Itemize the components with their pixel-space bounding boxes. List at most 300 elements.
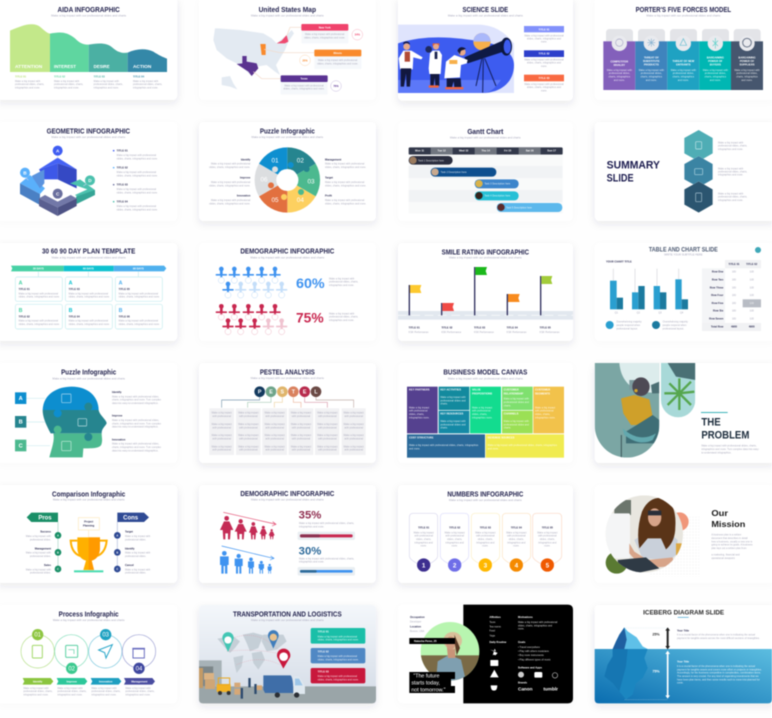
descriptions: Innovation <box>112 437 126 441</box>
card B 30 days: slides, charts, infographics and more. <box>19 323 60 326</box>
stage descriptions: infographics and more. <box>94 86 119 89</box>
column: bargaining power of buyers: and more. <box>710 79 721 82</box>
flag labels: KSK Performance <box>474 331 495 334</box>
pros column: Pros <box>38 515 52 521</box>
stage descriptions: professional slides, charts, <box>94 83 123 86</box>
task bar 4 <box>475 191 519 200</box>
key partners: slides, charts, <box>409 413 424 416</box>
motivation and goals text: Software and Apps <box>518 665 542 669</box>
cons column: Cancel <box>125 563 134 567</box>
text block 3: more. <box>541 89 547 92</box>
data table: Total Row <box>711 324 724 328</box>
descriptions: professional slides, charts, <box>718 145 748 148</box>
shield 5: with professional <box>538 535 557 538</box>
card B 30 days <box>15 304 62 329</box>
accent line <box>678 616 689 619</box>
descriptions: data into easy-to-understand infographics. <box>112 402 159 405</box>
below water text: payment for tangible assets and covers more effort on projects or intangibles. <box>677 668 762 671</box>
stage descriptions: professional slides, charts, <box>54 83 84 86</box>
shield 5 <box>533 513 562 572</box>
heading <box>711 508 745 529</box>
wave area chart: ATTENTION <box>15 64 42 69</box>
timeline arrow bar: 90 DAYS <box>133 266 144 270</box>
heading: PESTEL ANALYSIS <box>260 369 315 376</box>
data table: Row One <box>712 270 724 274</box>
info box 3: Make a big impact with professional <box>318 675 357 678</box>
column: threat of substitute products: THREAT OF <box>644 55 659 59</box>
text block 1 <box>524 26 564 44</box>
subtitle: Make a big impact with our professional slides and charts <box>51 13 127 17</box>
stage descriptions: infographics and more. <box>54 86 80 89</box>
heading: AIDA INFOGRAPHIC <box>57 7 120 14</box>
stat 75 percent <box>296 309 359 325</box>
process descriptions: infographics and more. <box>57 693 83 696</box>
wave area chart: DESIRE <box>94 64 110 69</box>
list items: slides, charts, infographics and more. <box>117 174 158 177</box>
card background <box>0 0 177 100</box>
column 6: with professional <box>344 437 363 440</box>
card B 90 days <box>115 304 162 329</box>
description: going to achieve its goals. A business <box>711 544 753 547</box>
descriptions: professional slides, charts, <box>718 196 748 199</box>
column 1: Make a big impact <box>212 412 232 415</box>
subtitle: Make a big impact with our professional slides and charts <box>448 13 524 17</box>
app icons <box>518 672 558 678</box>
heading: DEMOGRAPHIC INFOGRAPHIC <box>240 491 334 498</box>
left labels: slides, charts, infographics and more. <box>209 202 251 205</box>
right labels: slides, charts, infographics and more. <box>325 202 366 205</box>
value propositions: with professional <box>472 410 491 413</box>
column 3: with professional <box>265 415 284 418</box>
left labels: slides, charts, infographics and more. <box>209 184 251 187</box>
column 6: Make a big impact <box>344 445 364 448</box>
task bar 3: Task 3 Description here <box>484 183 511 186</box>
shield 2: TITLE 02 <box>449 526 461 530</box>
PESTEL circles: L <box>314 390 318 396</box>
task bar 1: Task 1 Description here <box>418 159 445 162</box>
name bar <box>409 638 455 644</box>
key resources: Make a big impact with <box>440 420 466 423</box>
column: bargaining power of buyers: charts, infographics <box>705 75 727 78</box>
step 3: 03 <box>102 633 110 639</box>
panel: summary slide <box>595 122 772 221</box>
US map <box>213 27 314 89</box>
cons column: professional slides. <box>125 538 146 541</box>
cons column: Make a big impact with <box>125 568 151 571</box>
heading: DEMOGRAPHIC INFOGRAPHIC <box>240 249 334 256</box>
shield 5: TITLE 05 <box>542 526 553 530</box>
column 5: with professional <box>318 415 337 418</box>
stage descriptions: professional slides, charts, <box>15 83 45 86</box>
shield 1: 1 <box>422 562 426 569</box>
card A 60 days: slides, charts, infographics and more. <box>69 296 110 299</box>
subtitle: Make a big impact with our professional slides and charts <box>251 376 325 380</box>
value propositions: slides, charts, <box>472 413 487 416</box>
panel: United States map <box>199 0 376 100</box>
heading: United States Map <box>259 7 316 14</box>
column: threat of substitute products: professional slides, <box>641 72 662 75</box>
info box 1 <box>311 628 365 644</box>
illustration: scientists with telescope <box>398 25 514 93</box>
column 5: with professional <box>318 449 337 452</box>
isometric diagram: B <box>23 170 27 175</box>
customer segments <box>533 387 564 433</box>
card B 90 days: Make a big impact with professional <box>119 320 158 323</box>
shield 1 <box>409 513 438 572</box>
left labels: Identify <box>241 157 251 161</box>
task bar 1 <box>409 156 453 165</box>
callout: Illinois: Make a big impact with professional <box>318 59 358 62</box>
column 3: Make a big impact <box>265 434 285 437</box>
text block 3: slides, charts, infographics and <box>527 86 562 89</box>
card background <box>398 363 573 463</box>
callout: New York: 34% <box>355 33 361 37</box>
left labels: Improve <box>240 176 251 180</box>
card background <box>0 605 177 703</box>
description: A business plan is a written <box>711 534 742 537</box>
column 6: Make a big impact <box>344 423 364 426</box>
timeline arrow bar <box>11 266 166 277</box>
pros column: A <box>57 533 59 537</box>
heading: SUMMARY <box>607 160 660 172</box>
shield 2: 2 <box>453 562 457 569</box>
stat 75 percent: professional slides, charts, <box>329 316 359 319</box>
interests column: Daily Routine <box>489 640 507 644</box>
column: bargaining power of suppliers: SUPPLIERS <box>739 63 755 67</box>
photo: plant on desk <box>661 360 695 420</box>
stat 60 percent <box>296 275 359 291</box>
data table: 100 <box>750 278 754 281</box>
stat 75 percent: Make a big impact with <box>329 313 355 316</box>
column 1: with professional <box>212 426 231 429</box>
column 5: with professional <box>318 437 337 440</box>
circle photo of woman with hat <box>419 622 483 682</box>
process tags: Innovation <box>99 679 113 683</box>
column 6: Make a big impact <box>344 434 364 437</box>
panel: puzzle head infographic <box>0 363 177 463</box>
blue figures 60 percent <box>216 267 287 298</box>
channels: charts. <box>504 427 511 430</box>
card background <box>398 485 573 583</box>
card A 30 days: Make a big impact with professional <box>19 292 58 295</box>
PESTEL circles: T <box>292 390 296 396</box>
process descriptions: professional slides, charts, <box>23 690 53 693</box>
chart header: Mon 11 <box>415 149 425 153</box>
description <box>711 534 753 560</box>
right labels: Make a big impact with professional <box>325 199 365 202</box>
column: threat of new entrants: Make a big impact with <box>671 69 697 72</box>
panel: resume slide <box>398 605 573 703</box>
data table: 100 <box>732 271 737 274</box>
cons column: Identify <box>125 546 135 550</box>
cons column: professional slides. <box>125 555 146 558</box>
left labels: Occupation <box>410 615 425 619</box>
column: competitor rivalry: professional slides, <box>609 72 630 75</box>
puzzle wheel: 05 <box>271 197 279 204</box>
column: threat of substitute products <box>635 29 667 90</box>
panel: our mission <box>604 495 752 574</box>
key resources: KEY RESOURCES <box>440 412 464 416</box>
callout: Texas: 76% <box>333 84 339 88</box>
pros column: professional slides. <box>30 572 51 575</box>
panel: table and chart slide <box>595 243 772 341</box>
column: bargaining power of suppliers: professional slides, <box>736 72 758 75</box>
photo: woman at computer <box>606 495 684 574</box>
shield 3: 3 <box>484 562 488 569</box>
road <box>398 311 573 320</box>
card background <box>0 485 177 583</box>
panel: comparison infographic <box>0 485 177 583</box>
column: bargaining power of suppliers: charts, infographics <box>736 75 759 78</box>
stat 30 percent: 30% <box>299 545 322 557</box>
key activities: Make a big impact with <box>440 396 466 399</box>
process tags: Identify <box>33 679 43 683</box>
motivation and goals text: • Play with others musicians <box>518 650 550 653</box>
chart legend: professional layout. <box>616 327 638 330</box>
column 1: with professional <box>212 449 231 452</box>
column 3: with professional <box>265 449 284 452</box>
description: document that describes in detail <box>711 537 748 540</box>
callout: Illinois <box>300 50 361 69</box>
info box 1: TITLE 01 <box>318 630 329 634</box>
customer relationship: RELATIONSHIP <box>504 391 523 395</box>
customer segments: SEGMENTS <box>535 391 550 395</box>
channels: professional slides and <box>504 423 530 426</box>
key partners: with professional <box>409 410 428 413</box>
column: threat of substitute products: charts, infographics <box>641 75 663 78</box>
motivation and goals text: Motivations <box>518 615 533 619</box>
text block 3: TITLE 03 <box>538 76 550 80</box>
brands: tumblr <box>543 686 558 691</box>
process tags: Improve <box>66 679 77 683</box>
value propositions: VALUE <box>472 388 481 392</box>
flag labels: KSK Performance <box>540 331 560 334</box>
process descriptions: infographics and more. <box>91 693 117 696</box>
column 1: with professional <box>212 415 231 418</box>
puzzle wheel: 02 <box>297 158 304 165</box>
cost structure <box>407 434 485 458</box>
list items <box>113 149 158 211</box>
declining arrow red <box>223 512 276 526</box>
descriptions: charts, infographics and more. Turn complex <box>112 399 162 402</box>
list items: Make a big impact with professional <box>117 171 156 174</box>
motivation and goals text: more. <box>518 627 525 630</box>
bar chart: Q2 <box>637 311 641 314</box>
shield 3 <box>471 513 500 572</box>
column: competitor rivalry <box>603 29 635 90</box>
panel: iceberg diagram <box>595 605 772 703</box>
process descriptions <box>23 687 155 696</box>
stage descriptions: infographics and more. <box>133 86 159 89</box>
stage descriptions: TITLE 02 <box>54 74 66 78</box>
key activities <box>439 387 469 410</box>
column 1: Make a big impact <box>212 445 232 448</box>
column 6: with professional <box>344 415 363 418</box>
heading: 30 60 90 DAY PLAN TEMPLATE <box>42 249 136 256</box>
list items: TITLE 01 <box>117 149 128 153</box>
column 1: Make a big impact <box>212 434 232 437</box>
column 3: Make a big impact <box>265 423 285 426</box>
PESTEL circles: S <box>281 390 285 396</box>
key activities: charts. <box>440 403 448 406</box>
column 4: with professional <box>292 415 311 418</box>
descriptions: Make a big impact with professional slides, <box>112 443 159 446</box>
shield 2: with professional <box>445 535 464 538</box>
subtitle: Make a big impact with our professional slides and charts <box>251 618 324 622</box>
customer relationship: charts. <box>504 404 511 407</box>
card A 60 days <box>65 277 112 301</box>
process descriptions: Make a big impact with <box>91 687 117 690</box>
shield 1: more. <box>420 545 427 548</box>
project planning box <box>78 518 99 537</box>
descriptions: Make a big impact with <box>718 142 744 145</box>
measure arrows: 75% <box>652 670 660 674</box>
badge icon <box>755 247 761 253</box>
card background <box>0 122 177 221</box>
chart header: Sat 16 <box>526 149 534 153</box>
card A 90 days: TITLE 05 <box>119 287 130 291</box>
cons column: A <box>116 533 118 537</box>
callout: Texas: slides, charts, infographics and more. <box>283 88 325 91</box>
value propositions: infographics more. <box>472 416 493 419</box>
left labels: slides, charts, infographics and more. <box>209 166 251 169</box>
card B 60 days: Make a big impact with professional <box>69 320 108 323</box>
descriptions: data into easy-to-understand infographics. <box>112 449 159 452</box>
descriptions: charts, infographics and more. Turn complex <box>112 446 162 449</box>
process descriptions: Make a big impact with <box>57 687 83 690</box>
subtitle: Make a big impact with our professional slides and charts <box>449 256 522 260</box>
key partners <box>407 387 438 433</box>
flag 3 green <box>474 267 487 315</box>
task bar 2 <box>431 168 496 177</box>
channels: Make a big impact with <box>504 420 530 423</box>
column: bargaining power of suppliers: and more. <box>741 79 753 82</box>
info box 2: Make a big impact with professional <box>318 655 357 658</box>
key activities: professional slides and <box>440 399 466 402</box>
interests column <box>489 615 507 644</box>
interests column: Affinities <box>489 615 501 619</box>
callout: New York: New York <box>319 25 331 29</box>
motivation and goals text: Make a big impact with professional <box>518 621 558 624</box>
heading: Puzzle Infographic <box>61 370 116 377</box>
shield 2: Make a big impact <box>445 531 465 534</box>
data table: Row Seven <box>709 317 724 321</box>
column: threat of new entrants <box>667 29 699 90</box>
black panel <box>463 605 573 703</box>
motivation and goals text <box>518 615 558 669</box>
shield 1: Make a big impact <box>414 531 434 534</box>
subtitle: Make a big impact with our professional slides and charts <box>251 13 324 17</box>
revenue sources: Make a big impact with professional slides, charts, infographics <box>488 444 558 447</box>
heading: BUSINESS MODEL CANVAS <box>443 370 528 377</box>
motivation and goals text: • Travel everywhere <box>518 646 540 649</box>
data table <box>702 260 761 331</box>
flag labels: TITLE 02 <box>441 326 453 330</box>
flag 4 orange <box>507 294 520 315</box>
left labels: Make a big impact with professional <box>211 199 251 202</box>
above water text <box>677 628 760 640</box>
column: bargaining power of buyers: BUYERS <box>710 63 721 67</box>
flag labels: KSK Performance <box>507 331 527 334</box>
column: competitor rivalry: COMPETITOR <box>610 60 628 64</box>
column 4: with professional <box>292 426 311 429</box>
left labels: Location <box>410 625 421 629</box>
isometric diagram: D <box>88 178 92 183</box>
stat 35 percent: 35% <box>299 510 322 522</box>
info box 1: Make a big impact with professional <box>318 635 357 638</box>
stage descriptions: infographics and more. <box>15 86 41 89</box>
green circle <box>606 552 628 574</box>
process descriptions: professional slides, charts, <box>125 690 155 693</box>
stat 35 percent <box>298 510 355 540</box>
forklift and workers <box>217 678 262 699</box>
descriptions: Make a big impact with <box>718 167 744 170</box>
bar chart: Q4 <box>680 311 684 314</box>
heading: NUMBERS INFOGRAPHIC <box>447 492 523 499</box>
heading: Puzzle Infographic <box>260 129 315 136</box>
card B 90 days: TITLE 06 <box>119 314 130 318</box>
heading: THE <box>701 417 721 429</box>
below water text: have been plan items, and then some results such to move into planned for <box>677 678 760 681</box>
heading <box>607 160 660 184</box>
subtitle: Make a big impact with our professional slides and charts <box>251 135 324 139</box>
heading: SCIENCE SLIDE <box>462 7 508 14</box>
heading: TABLE AND CHART SLIDE <box>649 247 718 253</box>
description: operational viewpoint. <box>711 557 736 560</box>
text block 2 <box>524 50 564 68</box>
data table: Row Five <box>712 301 724 305</box>
stat 30 percent: infographics and more. <box>299 561 325 564</box>
flag labels: KSK Performance <box>441 331 462 334</box>
PESTEL circles: E <box>269 390 273 396</box>
right labels: Make a big impact with professional <box>325 163 365 166</box>
heading: Our <box>711 508 729 518</box>
shield 4: Make a big impact <box>506 531 527 534</box>
data table: TITLE 01 <box>728 262 740 266</box>
label boxes: B <box>19 420 23 426</box>
subtitle: Make a big impact with our professional slides and charts <box>646 13 721 17</box>
stat 60 percent: professional slides, charts, <box>329 281 359 284</box>
shield 4: with professional <box>507 535 526 538</box>
cost structure: COST STRUCTURE <box>409 435 434 439</box>
wave area chart: INTEREST <box>54 64 76 69</box>
shield 1: with professional <box>414 535 433 538</box>
pros column: Make a big impact with <box>26 552 52 555</box>
cons column: professional slides. <box>125 572 146 575</box>
shield 5: more. <box>544 545 551 548</box>
process descriptions: infographics and more. <box>125 693 151 696</box>
motivation and goals text: slides, charts, infographics and <box>518 624 553 627</box>
stat 30 percent <box>298 545 355 576</box>
card A 90 days <box>115 277 162 301</box>
callout: Illinois: slides, charts, infographics and more. <box>317 62 359 65</box>
column: bargaining power of suppliers: POWER OF <box>740 59 755 63</box>
world map with pins <box>217 630 290 673</box>
step 2 <box>55 635 88 674</box>
heading: PORTER'S FIVE FORCES MODEL <box>636 7 732 14</box>
flag 1 yellow <box>409 285 421 315</box>
card background <box>595 485 772 583</box>
PESTEL circles: P <box>258 390 262 396</box>
panel: geometric infographic <box>0 122 177 221</box>
info box 3 <box>311 668 365 683</box>
data table: Row Two <box>712 277 724 281</box>
accent line <box>701 412 728 413</box>
column: threat of new entrants: professional slides, <box>673 72 694 75</box>
above water text: payment for tangible assets across the most difficult sections of intangibles. <box>677 637 760 640</box>
card background <box>199 485 376 583</box>
subtitle: Make a big impact with our professional slides and charts <box>450 135 521 139</box>
